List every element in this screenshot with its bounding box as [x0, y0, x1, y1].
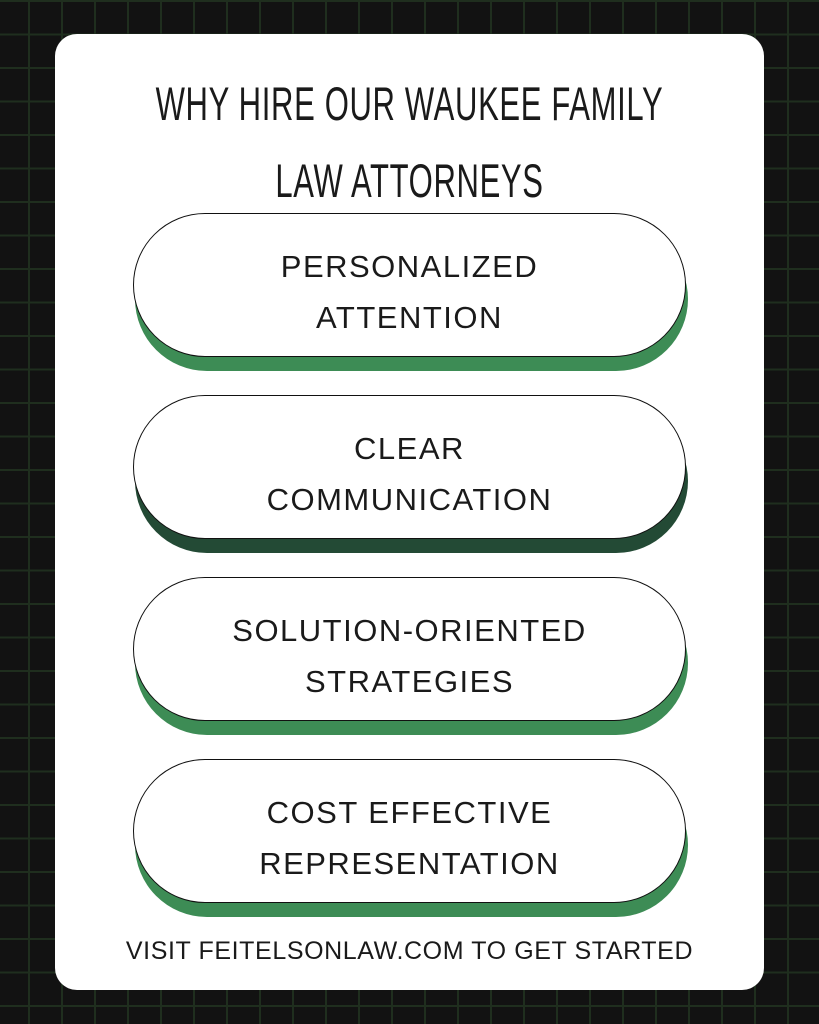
pill: cost effective representation	[133, 759, 686, 903]
title: LAW ATTORNEYS	[275, 154, 544, 207]
pill: solution-oriented strategies	[133, 577, 686, 721]
pill: cost effective representation: COST EFFECTIVE	[267, 795, 552, 830]
pill: cost effective representation: REPRESENTATION	[259, 846, 560, 881]
pill: personalized attention: ATTENTION	[316, 300, 503, 335]
pill: personalized attention: PERSONALIZED	[281, 249, 538, 284]
title	[156, 77, 663, 207]
title: WHY HIRE OUR WAUKEE FAMILY	[156, 77, 663, 130]
pill: personalized attention	[133, 213, 686, 357]
pill: solution-oriented strategies: STRATEGIES	[305, 664, 514, 699]
pill: clear communication: COMMUNICATION	[267, 482, 552, 517]
footer: VISIT FEITELSONLAW.COM TO GET STARTED	[126, 937, 693, 965]
pill: clear communication	[133, 395, 686, 539]
pill: clear communication: CLEAR	[354, 431, 465, 466]
pill: solution-oriented strategies: SOLUTION-ORIENTED	[232, 613, 587, 648]
